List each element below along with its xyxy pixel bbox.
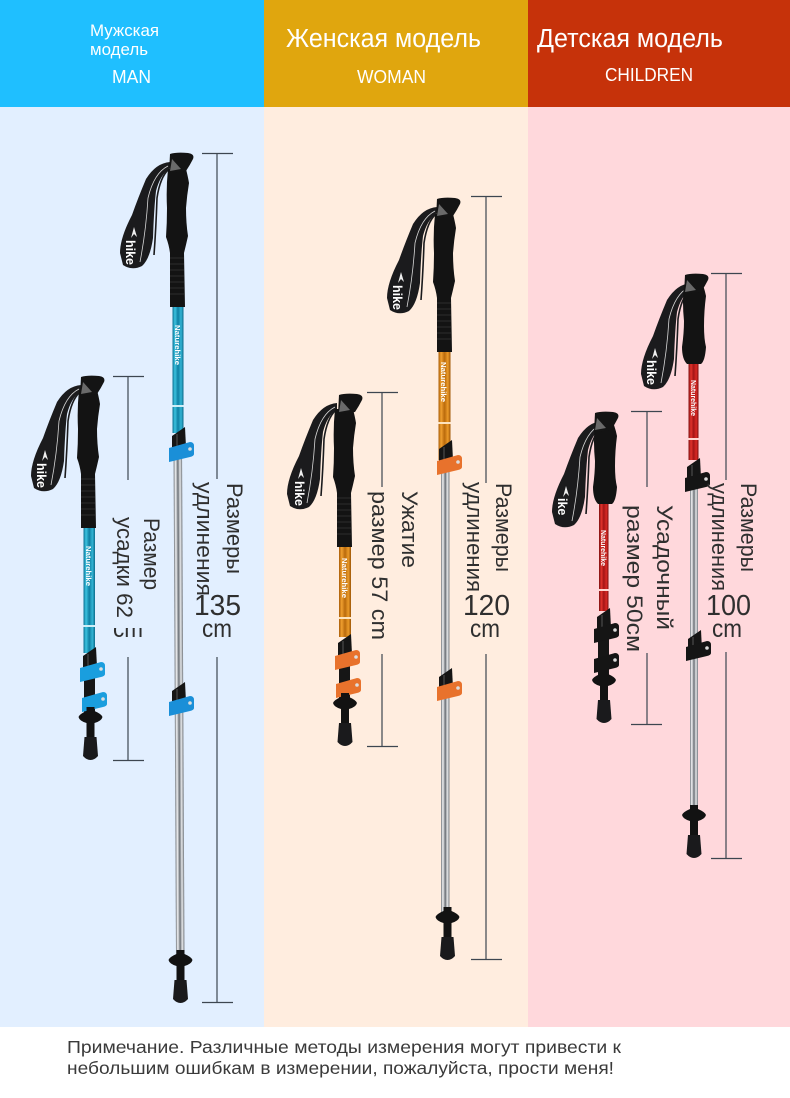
dimension: blue folded: усадки 62 [112,517,137,618]
dimension: red extended [706,273,761,858]
blue pole folded: Naturehike [84,546,91,586]
header: woman: WOMAN [357,67,426,87]
dimension: red folded: Усадочный [652,505,677,630]
dimension: orange extended: cm [470,615,500,643]
dimension: blue extended: Размеры [222,483,247,574]
orange pole extended [387,198,462,960]
dimension: orange extended: удлинения [462,482,487,592]
header: children: Детская модель [537,25,723,53]
dimension: red extended: Размеры [736,483,761,572]
orange pole folded: Naturehike [340,558,347,598]
orange pole extended: hike [390,285,404,310]
footnote: Примечание. Различные методы измерения могут привести к [67,1037,621,1057]
red pole extended [641,274,711,858]
dimension: orange folded: Ужатие [397,491,422,568]
blue pole folded: hike [34,463,48,488]
dimension: orange extended [462,196,516,960]
red pole folded [552,412,619,723]
dimension: blue extended [192,153,247,1003]
dimension: red folded: размер 50см [622,505,647,652]
orange pole extended: Naturehike [439,362,446,402]
dimension: blue folded [112,376,164,760]
footnote: небольшим ошибкам в измерении, пожалуйста, прости меня! [67,1058,614,1078]
footnote [67,1037,621,1078]
header: man: модель [90,40,148,59]
dimension: blue extended: 135 [194,590,241,622]
header: children: CHILDREN [605,65,693,85]
dimension: red extended: cm [712,615,742,643]
red pole extended: Naturehike [689,380,696,416]
red pole extended: hike [644,360,658,385]
blue pole folded [31,376,107,760]
red pole folded: Naturehike [599,530,606,566]
dimension: orange folded: размер 57 cm [367,491,392,640]
dimension: red extended: удлинения [707,483,732,591]
header: man [0,0,264,107]
blue pole extended: Naturehike [173,325,180,365]
header: woman [264,0,528,107]
header: man: Мужская [90,21,159,40]
dimension: red folded [622,411,677,724]
orange pole folded [287,394,362,746]
red pole folded: ike [555,498,569,515]
dimension: red extended: 100 [706,590,751,622]
header: children [528,0,790,107]
dimension: blue extended: удлинения [192,482,217,596]
header: woman: Женская модель [286,25,481,53]
dimension: blue extended: cm [202,615,232,643]
dimension: orange folded [367,392,422,747]
blue pole extended: hike [123,240,137,265]
dimension: orange extended: 120 [463,590,510,622]
dimension: blue folded: cm [113,615,143,643]
dimension: orange extended: Размеры [491,483,516,572]
dimension: blue folded: Размер [139,518,164,590]
orange pole folded: hike [292,481,306,506]
blue pole extended [120,153,194,1003]
header: man: MAN [112,67,151,87]
